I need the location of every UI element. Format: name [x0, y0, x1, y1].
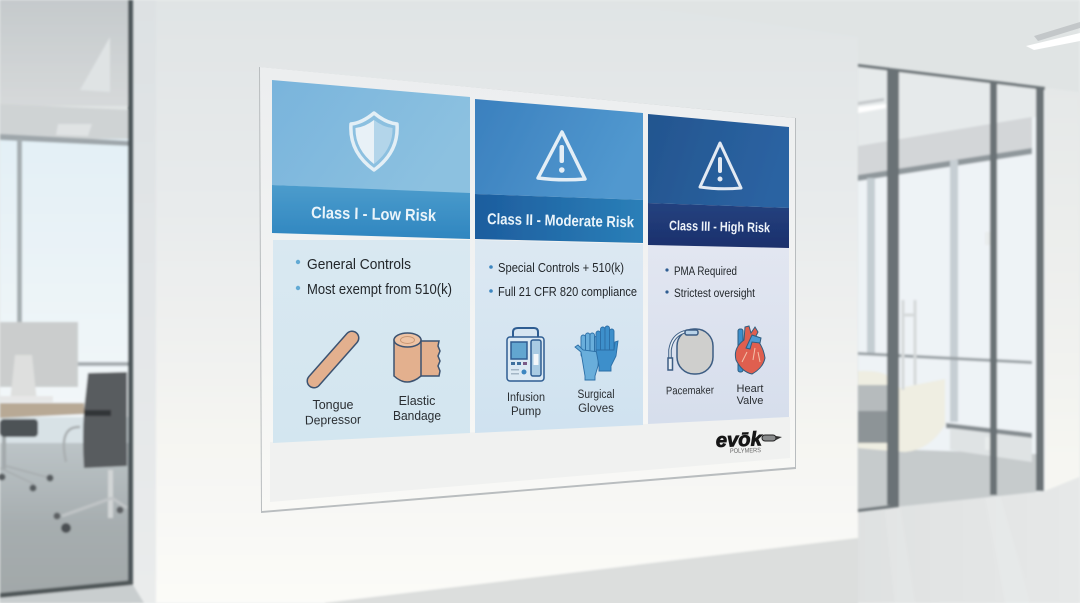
- left glove: [575, 333, 599, 380]
- icon: infusion pump: [507, 328, 544, 381]
- door hinges: [985, 232, 990, 450]
- bullet list: Class I: General Controls: [307, 257, 411, 273]
- icon: tongue depressor: [314, 338, 352, 381]
- label: elastic bandage: Bandage: [393, 409, 441, 423]
- icon: shield: [351, 113, 397, 170]
- ceiling light: [1026, 22, 1080, 50]
- heading: Class III: Class III - High Risk: [669, 218, 771, 235]
- icon: warning triangle: [700, 143, 741, 189]
- bullet list: Class III: Strictest oversight: [674, 288, 756, 300]
- ceiling light in glass reflection: [858, 98, 886, 113]
- icon: warning triangle: [538, 132, 585, 180]
- bullet list: Class II: [489, 261, 637, 299]
- bullet list: Class I: Most exempt from 510(k): [307, 282, 452, 298]
- panel: Class III: [648, 114, 789, 424]
- logo: evok polymers: POLYMERS: [730, 447, 762, 455]
- glass door frames: [858, 64, 1045, 512]
- panel: Class II: [475, 99, 643, 433]
- label: surgical gloves: Surgical: [578, 389, 614, 401]
- poster board: [259, 67, 796, 513]
- left glass office room: [0, 0, 144, 603]
- cream sofa: [858, 371, 945, 452]
- label: elastic bandage: Elastic: [399, 394, 435, 408]
- label: elastic bandage: [393, 394, 441, 423]
- label: surgical gloves: Gloves: [578, 403, 614, 415]
- monitor and desk: [0, 322, 84, 418]
- label: tongue depressor: Tongue: [312, 398, 354, 412]
- label: pacemaker: Pacemaker: [666, 385, 714, 397]
- right glass partition and corridor: [858, 64, 1080, 512]
- icon: pacemaker: [668, 329, 713, 374]
- right glove: [596, 326, 618, 371]
- bullet list: Class I: [296, 257, 452, 298]
- logo: evok polymers: evōk: [715, 428, 763, 452]
- label: heart valve: Heart: [737, 383, 763, 395]
- icon: surgical gloves: [575, 326, 618, 380]
- poster: [259, 67, 796, 513]
- left small office chair: [0, 419, 54, 492]
- label: infusion pump: Infusion: [507, 392, 545, 404]
- bullet list: Class II: Special Controls + 510(k): [498, 261, 624, 275]
- icon: heart valve: [735, 326, 765, 374]
- label: tongue depressor: Depressor: [305, 413, 361, 427]
- label: infusion pump: [507, 392, 545, 418]
- heading: Class I: Class I - Low Risk: [311, 204, 437, 225]
- heading: Class II: Class II - Moderate Risk: [487, 211, 635, 231]
- office chair: [54, 372, 127, 533]
- bullet list: Class II: Full 21 CFR 820 compliance: [498, 285, 637, 299]
- label: infusion pump: Pump: [511, 406, 541, 418]
- bullet list: Class III: [665, 266, 756, 300]
- label: tongue depressor: [305, 398, 361, 427]
- panel: Class I: [272, 80, 470, 443]
- label: heart valve: [737, 383, 763, 407]
- bullet list: Class III: PMA Required: [674, 266, 737, 278]
- label: surgical gloves: [578, 389, 614, 415]
- door handle: [903, 300, 915, 390]
- logo: evok polymers: [715, 428, 782, 455]
- label: heart valve: Valve: [737, 395, 763, 407]
- icon: elastic bandage: [394, 333, 440, 382]
